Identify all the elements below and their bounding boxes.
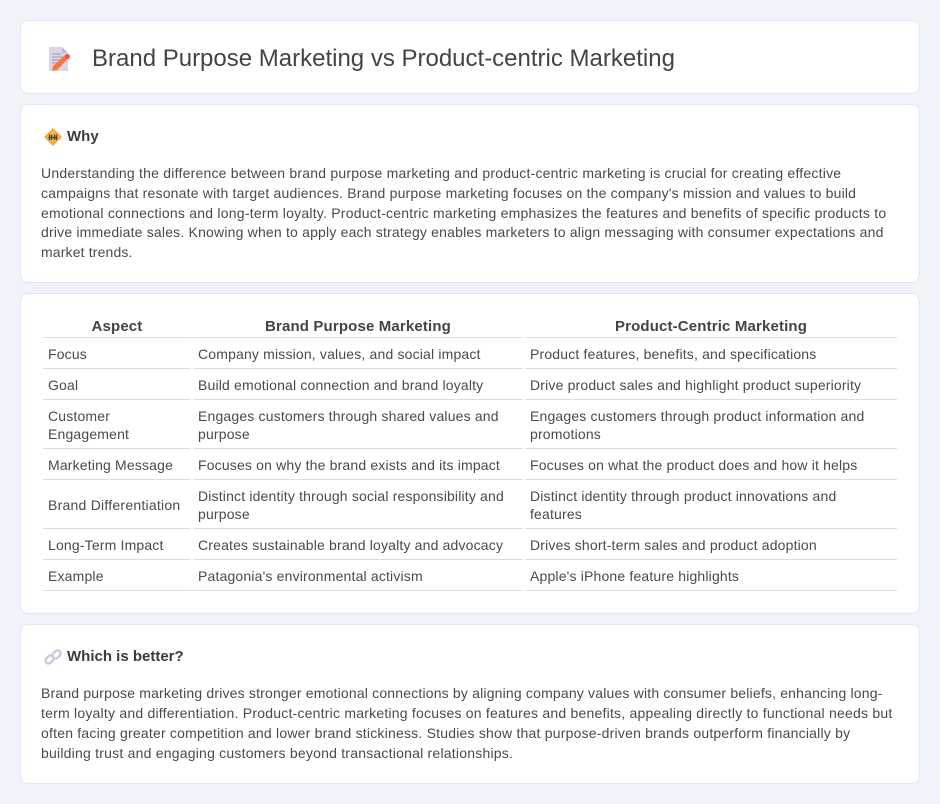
text block: verdict: Brand purpose marketing drives stronger emotional connections by aligning company values with consumer beliefs, enhancing long- — [41, 685, 883, 701]
text block: why explanation: campaigns that resonate with target audiences. Brand purpose marketing focuses on the company's mission and values to build — [41, 185, 856, 201]
row: brand differentiation: purpose — [198, 506, 250, 522]
icon: document with pencil — [49, 47, 70, 71]
panel: comparison table — [20, 293, 920, 614]
text block: verdict: term loyalty and differentiation. Product-centric marketing focuses on features and benefits, appealing directly to functional needs but — [41, 705, 892, 721]
text block: why explanation: Understanding the difference between brand purpose marketing and product-centric marketing is crucial for creating effective — [41, 165, 841, 181]
row: marketing message — [48, 457, 857, 473]
row: brand differentiation — [48, 488, 836, 522]
text block: why explanation: drive immediate sales. Knowing when to apply each strategy enables marketers to align messaging with consumer expectations and — [41, 224, 884, 240]
row: brand differentiation: Distinct identity through social responsibility and — [198, 488, 504, 504]
row: marketing message: Focuses on what the product does and how it helps — [530, 457, 857, 473]
row: customer engagement: Customer — [48, 408, 110, 424]
row: customer engagement: purpose — [198, 426, 250, 442]
row: focus — [48, 346, 816, 362]
row: brand differentiation: features — [530, 506, 582, 522]
heading: why: Why — [67, 128, 99, 145]
row: brand differentiation: Distinct identity through product innovations and — [530, 488, 836, 504]
row: customer engagement: Engages customers through product information and — [530, 408, 864, 424]
row: goal — [48, 377, 861, 393]
row: focus: Product features, benefits, and specifications — [530, 346, 816, 362]
row: customer engagement: Engages customers through shared values and — [198, 408, 499, 424]
row: long-term impact: Drives short-term sales and product adoption — [530, 537, 817, 553]
text block: why explanation — [41, 165, 886, 260]
table header row — [92, 318, 807, 335]
row: customer engagement: promotions — [530, 426, 601, 442]
row: brand differentiation: Brand Differentiation — [48, 497, 180, 513]
row: goal: Drive product sales and highlight product superiority — [530, 377, 861, 393]
panel: title — [20, 20, 920, 94]
heading: which is better: Which is better? — [67, 648, 184, 665]
row: goal: Goal — [48, 377, 78, 393]
row: customer engagement: Engagement — [48, 426, 129, 442]
text block: why explanation: market trends. — [41, 244, 133, 260]
text block: why explanation: emotional connections and long-term loyalty. Product-centric marketing emphasizes the features and benefits of specific products to — [41, 205, 886, 221]
row: marketing message: Marketing Message — [48, 457, 173, 473]
heading: page title: Brand Purpose Marketing vs Product-centric Marketing — [92, 45, 675, 72]
row: example: Apple's iPhone feature highlights — [530, 568, 739, 584]
icon: chain link — [44, 649, 62, 665]
row: example: Example — [48, 568, 104, 584]
row: long-term impact — [48, 537, 817, 553]
row: example — [48, 568, 739, 584]
text block: verdict: building trust and engaging customers beyond transactional relationships. — [41, 745, 513, 761]
panel: why — [20, 104, 920, 283]
row: example: Patagonia's environmental activism — [198, 568, 423, 584]
row: long-term impact: Creates sustainable brand loyalty and advocacy — [198, 537, 503, 553]
text block: verdict — [41, 685, 892, 761]
row: long-term impact: Long-Term Impact — [48, 537, 164, 553]
text block: verdict: often facing greater competition and lower brand stickiness. Studies show that purpose-driven brands outperform financially by — [41, 725, 850, 741]
row: marketing message: Focuses on why the brand exists and its impact — [198, 457, 500, 473]
row: focus: Company mission, values, and social impact — [198, 346, 481, 362]
icon: diamond sign — [44, 128, 62, 146]
row: focus: Focus — [48, 346, 87, 362]
panel: which is better — [20, 624, 920, 784]
row: goal: Build emotional connection and brand loyalty — [198, 377, 483, 393]
table header row: Brand Purpose Marketing — [265, 318, 451, 335]
table header row: Aspect — [92, 318, 142, 335]
table header row: Product-Centric Marketing — [615, 318, 807, 335]
row: customer engagement — [48, 408, 864, 442]
